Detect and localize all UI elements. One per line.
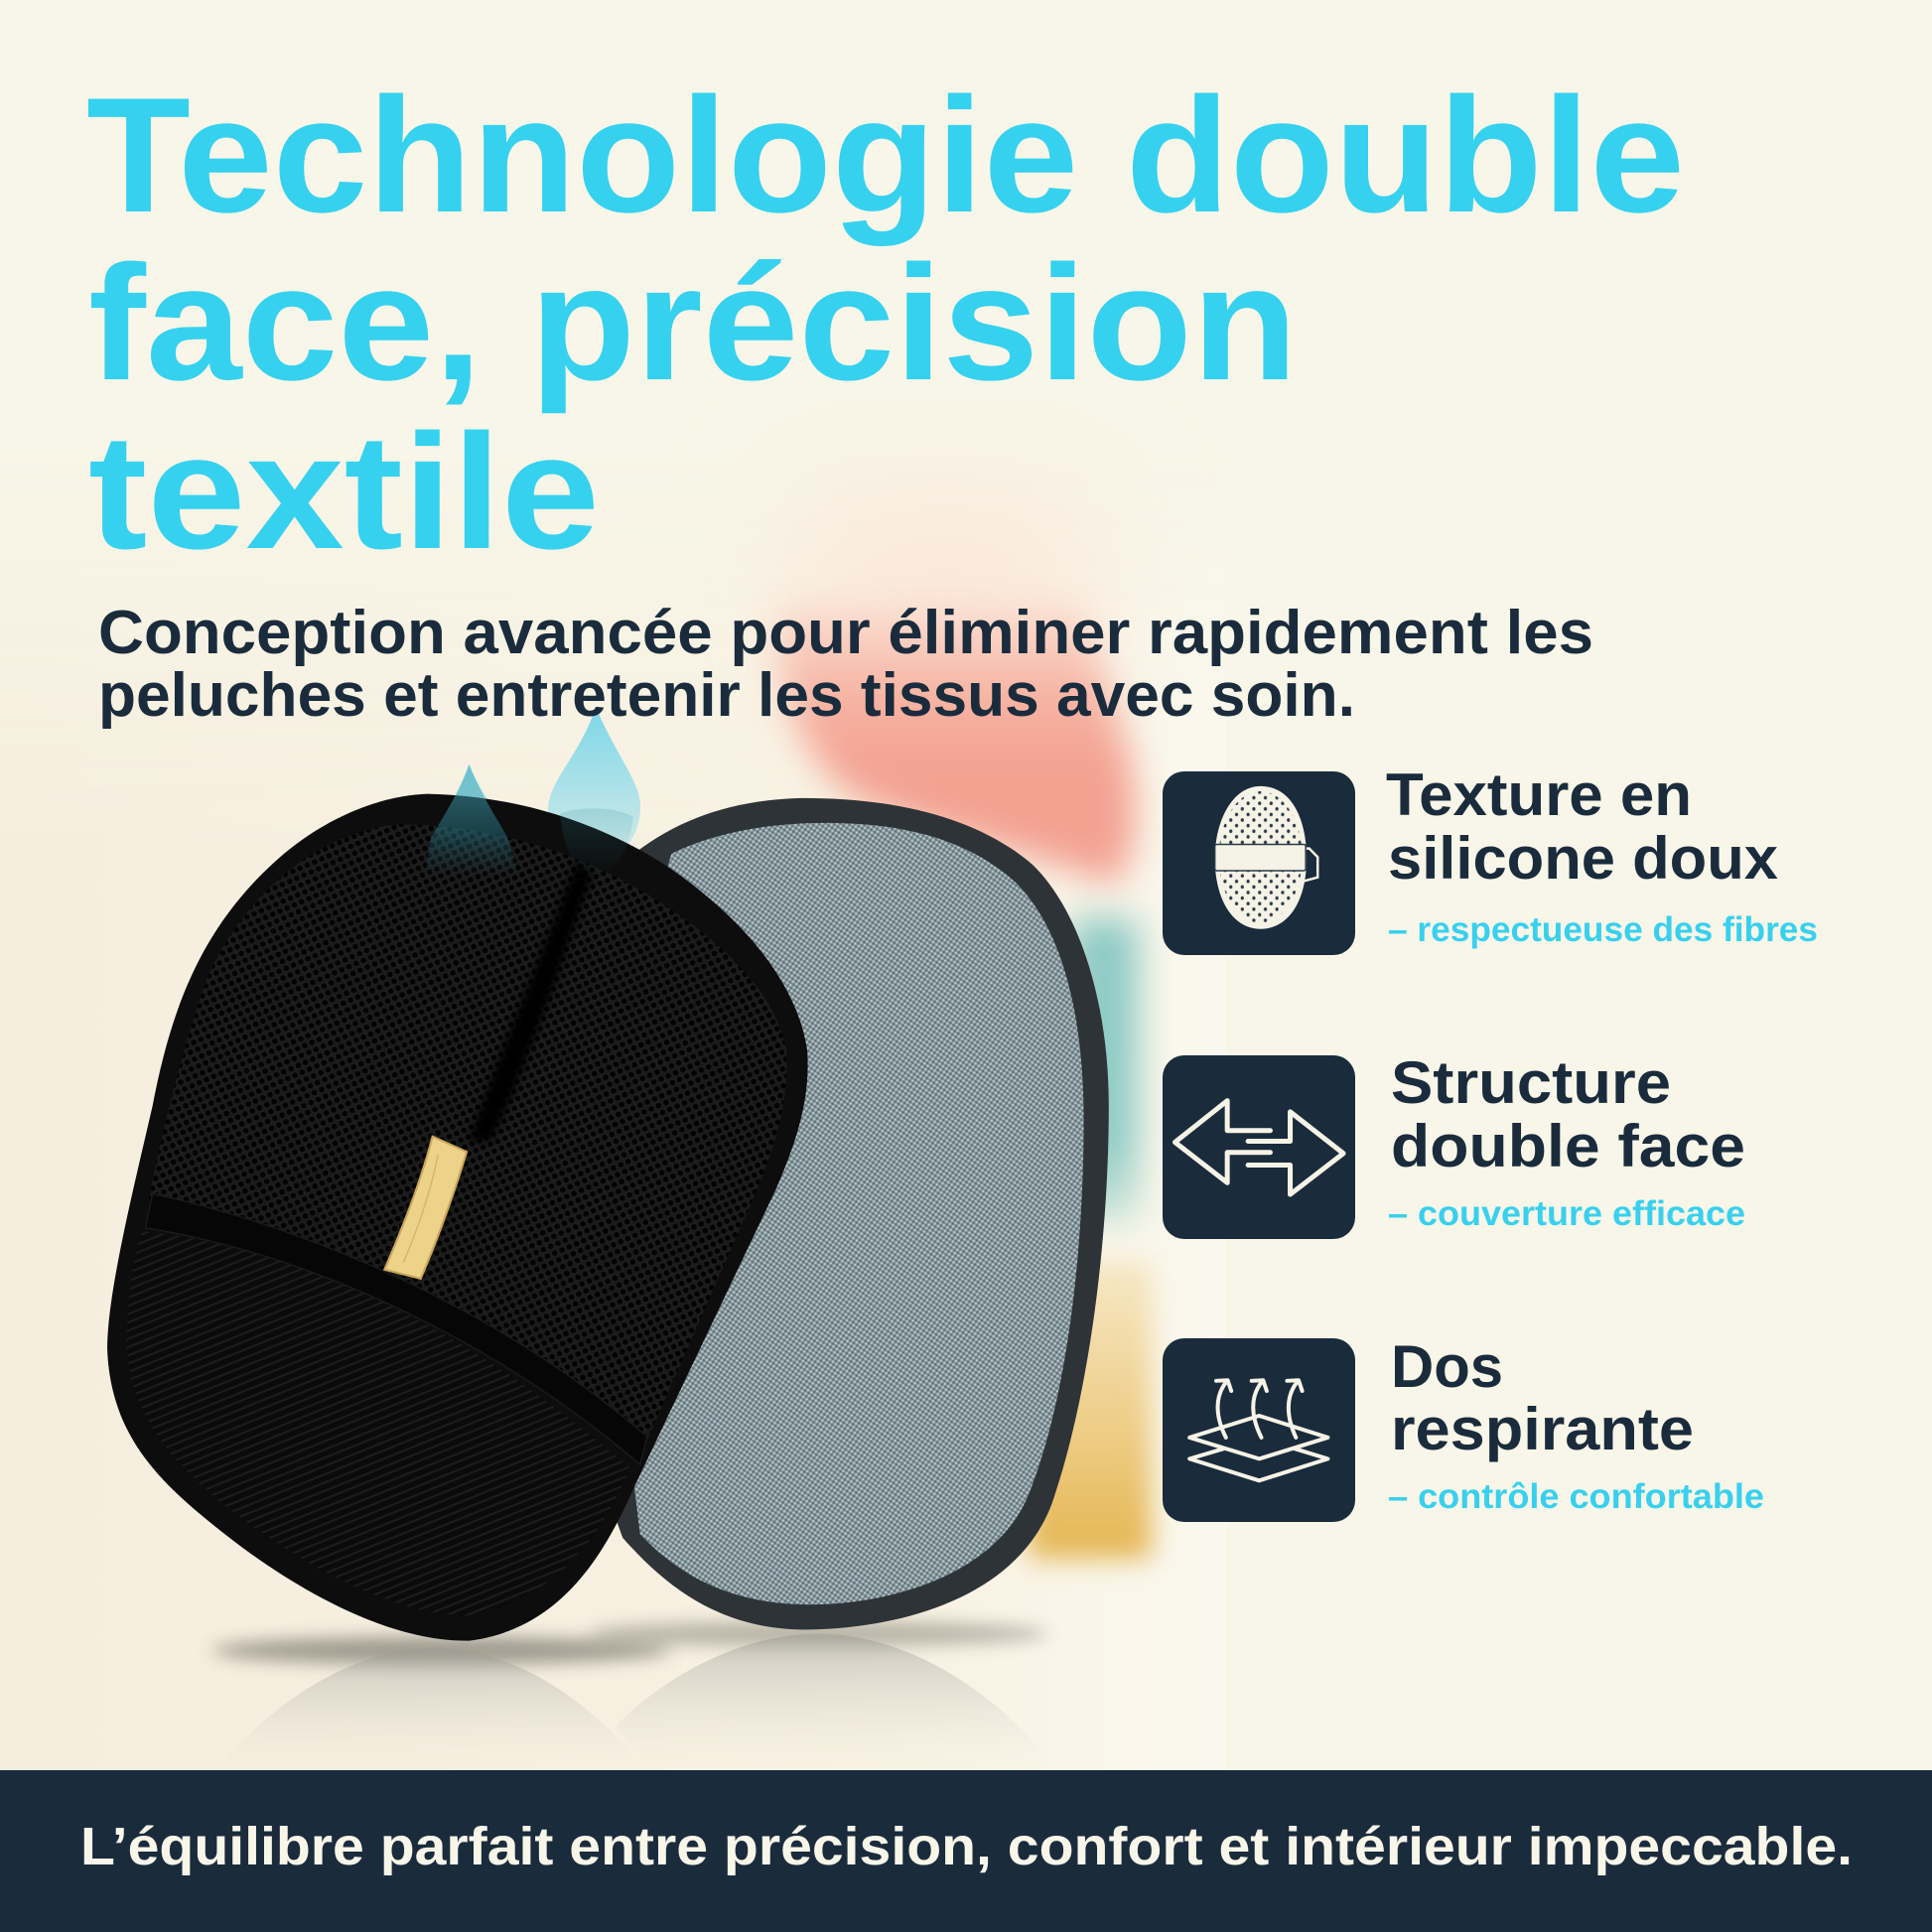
heading: Structure [1391,1049,1671,1116]
yellow pull tab [384,1137,467,1279]
subtitle: peluches et entretenir les tissus avec soin. [98,661,1355,730]
feature 3: breathable back [1163,1333,1764,1522]
heading: Texture en [1386,761,1692,828]
floor shadows and reflections [211,1621,1047,1767]
heading [1391,1049,1745,1179]
heading [1386,761,1778,892]
icon: silicone mitt [1163,771,1355,955]
footer banner: L’équilibre parfait entre précision, confort et intérieur impeccable. [80,1817,1853,1876]
subtext: – respectueuse des fibres [1388,910,1818,949]
feature 2: double-sided structure [1163,1049,1745,1239]
title: face, précision [88,231,1298,414]
heading: double face [1391,1113,1745,1179]
icon: layers with airflow [1163,1338,1355,1522]
background [0,491,1170,1770]
mesh fold [470,859,592,1141]
subtitle: Conception avancée pour éliminer rapidement les [98,599,1593,667]
translucent droplet overlay [424,764,633,876]
heading: Dos [1391,1333,1503,1400]
product: double-sided mitt [107,764,1109,1767]
footer banner [0,1770,1932,1932]
feature 1: silicone texture [1163,761,1818,955]
grey microfibre side [595,798,1109,1629]
subtitle [98,599,1593,730]
black mesh side [107,794,808,1641]
lower woven panel [127,1231,629,1615]
heading [1391,1333,1694,1462]
water droplets behind product [427,707,640,864]
upper mesh panel [149,824,786,1441]
title: textile [88,400,600,583]
title: Technologie double [86,64,1685,246]
icon: opposing arrows [1163,1055,1355,1239]
title [86,64,1685,583]
heading: respirante [1391,1396,1694,1462]
pocket band [146,1193,647,1464]
subtext: – contrôle confortable [1388,1477,1764,1516]
heading: silicone doux [1388,825,1778,892]
subtext: – couverture efficace [1388,1194,1745,1233]
